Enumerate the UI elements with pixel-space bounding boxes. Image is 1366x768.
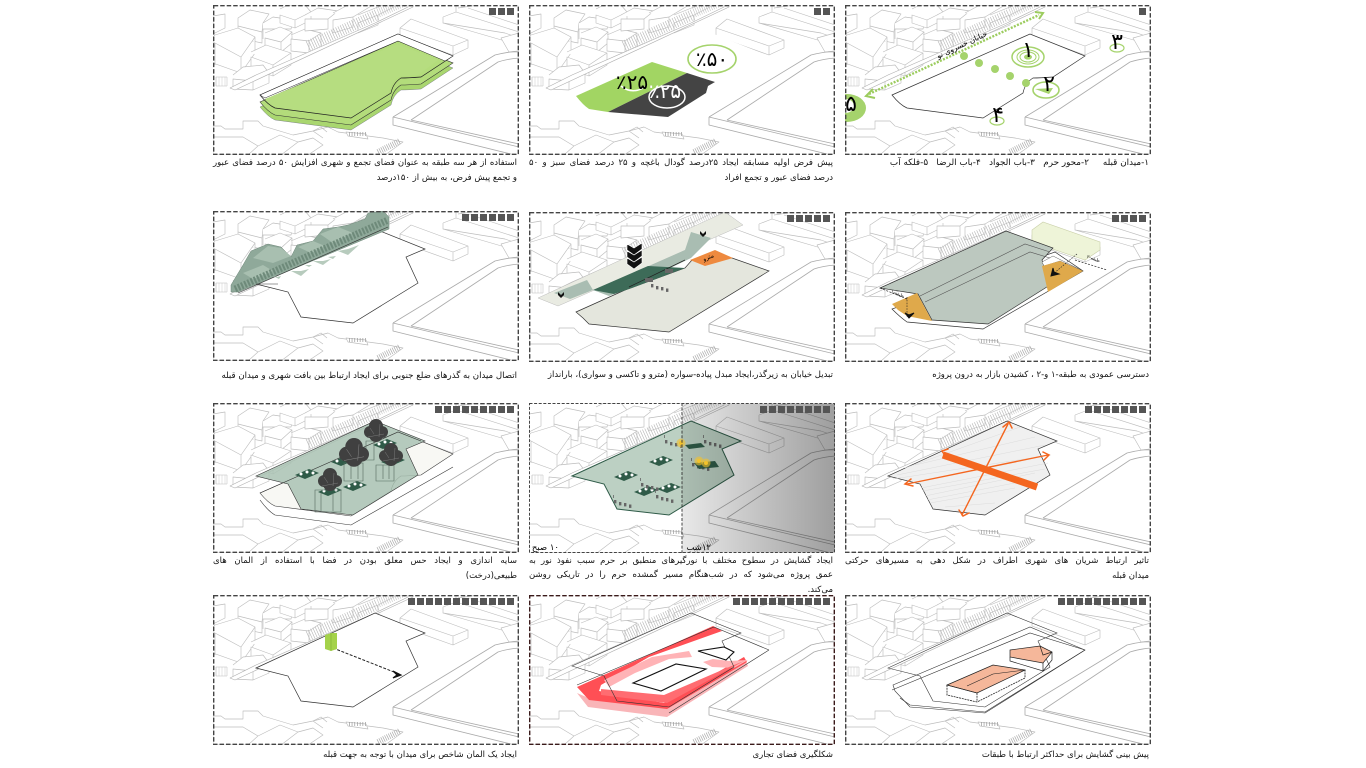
caption: initial assumption — [529, 157, 833, 183]
panel: row 4 openings — [845, 595, 1151, 745]
diagram: percentage shares: ٪۲۵ — [649, 79, 681, 103]
caption: initial assumption: درصد فضای عبور و تجمع افراد — [724, 173, 833, 183]
panel: row 3 trees — [213, 403, 519, 553]
panel: row 1 initial assumption — [529, 5, 835, 155]
diagram: percentage shares: ٪۵۰ — [696, 47, 728, 71]
panel: row 1 site key diagram — [845, 5, 1151, 155]
panel: row 4 qibla marker — [213, 595, 519, 745]
diagram: vertical access and bazaar: طبقه-۱ — [890, 290, 905, 300]
caption: vertical access: دسترسی عمودی به طبقه-۱ و-۲ ، کشیدن بازار به درون پروژه — [932, 370, 1149, 380]
caption: three levels: استفاده از هر سه طبقه به عنوان فضای تجمع و شهری افزایش ۵۰ درصد فضای عبور — [213, 158, 517, 168]
panel: row 4 commercial space — [529, 595, 835, 745]
diagram: numbered site locations — [845, 5, 1151, 155]
caption: southern passages: اتصال میدان به گذرهای ضلع جنوبی برای ایجاد ارتباط بین بافت شهری و میدان قبله — [221, 371, 517, 381]
caption: qibla marker: ایجاد یک المان شاخص برای میدان با توجه به جهت قبله — [323, 750, 517, 760]
diagram: vertical access and bazaar — [845, 212, 1151, 362]
caption: day and night skylights: عمق پروژه می‌شود که در شب‌هنگام مسیر گمشده حرم را در تاریکی روشن — [529, 570, 833, 580]
caption: day and night skylights: می‌کند. — [808, 585, 833, 595]
panel: row 2 vertical access — [845, 212, 1151, 362]
diagram: openings between levels — [845, 595, 1151, 745]
panel: row 3 urban arteries — [845, 403, 1151, 553]
caption: urban arteries — [845, 556, 1149, 581]
caption: urban arteries: میدان قبله — [1112, 571, 1149, 581]
caption: openings: پیش بینی گشایش برای حداکثر ارتباط با طبقات — [982, 750, 1149, 760]
diagram: numbered site locations: ۲ — [1043, 72, 1055, 97]
diagram: suspended trees — [213, 403, 519, 553]
caption: commercial space: شکلگیری فضای تجاری — [752, 750, 833, 760]
caption: underpass: تبدیل خیابان به زیرگذر،ایجاد مبدل پیاده-سواره (مترو و تاکسی و سواری)، بارانداز — [548, 370, 833, 380]
diagram: numbered site locations: ۴ — [992, 103, 1004, 128]
diagram: commercial red bands — [529, 595, 835, 745]
diagram: connection to urban fabric — [213, 211, 519, 361]
caption: three levels: و تجمع پیش فرض، به بیش از ۱۵۰درصد — [377, 173, 517, 183]
caption: day and night skylights — [529, 555, 833, 595]
caption: trees — [213, 556, 517, 581]
panel: row 2 southern passages — [213, 211, 519, 361]
panel: row 3 day and night skylights — [529, 403, 835, 553]
diagram: numbered site locations: خیابان خسروی نو — [934, 29, 989, 61]
diagram: marker element and qibla direction arrow — [213, 595, 519, 745]
diagram: light wells with day-night shading — [529, 403, 835, 553]
caption: site key: ۱-میدان قبله ۲-محور حرم ۳-باب الجواد ۴-باب الرضا ۵-فلکه آب — [890, 158, 1149, 168]
diagram: underpass and metro: مترو — [701, 252, 715, 263]
diagram: vertical access and bazaar: طبقه-۲ — [1086, 255, 1101, 264]
diagram: numbered site locations: ۵ — [845, 92, 857, 117]
caption: three levels — [212, 158, 517, 183]
diagram: numbered site locations: ۳ — [1111, 30, 1123, 55]
diagram: light wells with day-night shading: ۱۰ صبح — [532, 543, 559, 553]
diagram: underpass and metro — [529, 212, 835, 362]
diagram: percentage shares — [529, 5, 835, 155]
diagram: percentage shares: ٪۲۵ — [616, 70, 648, 94]
diagram: movement routes — [845, 403, 1151, 553]
caption: initial assumption: پیش فرض اولیه مسابقه ایجاد ۲۵درصد گودال باغچه و ۲۵ درصد فضای سبز و ۵۰ — [529, 158, 833, 168]
caption: trees: طبیعی(درخت) — [466, 571, 517, 581]
caption: urban arteries: تاثیر ارتباط شریان های شهری اطراف در شکل دهی به مسیرهای حرکتی — [845, 556, 1149, 566]
panel: row 1 three levels — [213, 5, 519, 155]
diagram: light wells with day-night shading: ۱۲شب — [686, 543, 711, 553]
caption: day and night skylights: ایجاد گشایش در سطوح مختلف با نورگیرهای منطبق بر حرم سبب نفوذ نور به — [529, 556, 833, 566]
caption: trees: سایه اندازی و ایجاد حس معلق بودن در فضا با استفاده از المان های — [213, 556, 517, 566]
diagram: stacked green levels — [213, 5, 519, 155]
diagram: numbered site locations: ۱ — [1022, 38, 1034, 63]
panel: row 2 underpass — [529, 212, 835, 362]
